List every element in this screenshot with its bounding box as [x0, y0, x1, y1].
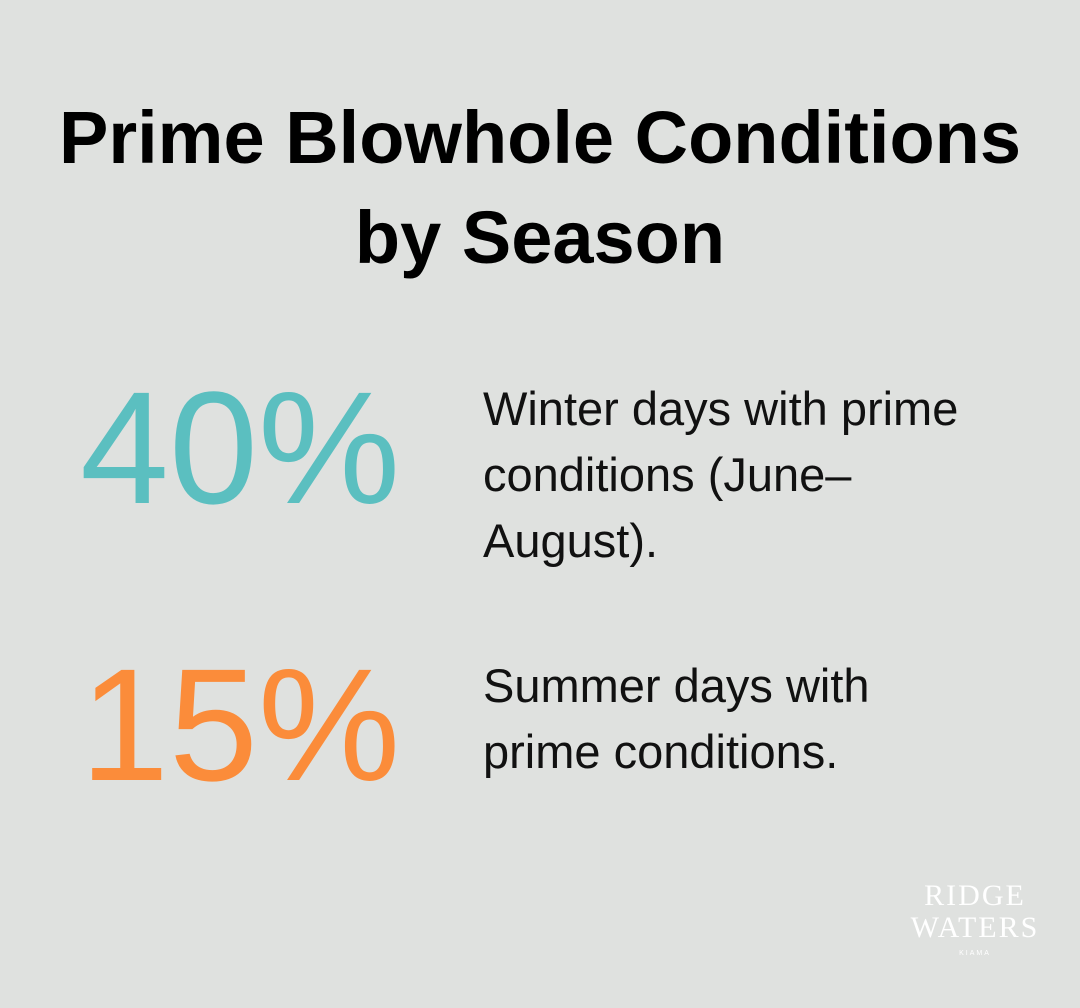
title: Prime Blowhole Conditions [59, 96, 1021, 179]
stat: 40%: 40% [80, 358, 400, 537]
logo [910, 879, 1039, 957]
title [59, 96, 1021, 279]
stat: 15%: 15% [80, 635, 400, 814]
text: summer: prime conditions. [483, 725, 838, 778]
logo: WATERS [911, 911, 1039, 944]
text: winter: August). [483, 514, 658, 567]
text: winter [483, 382, 958, 567]
text: summer: Summer days with [483, 659, 870, 712]
text: winter: conditions (June– [483, 448, 851, 501]
text: summer [483, 659, 870, 778]
logo: KIAMA [959, 950, 991, 957]
title: by Season [355, 196, 725, 279]
text: winter: Winter days with prime [483, 382, 958, 435]
logo: RIDGE [924, 879, 1026, 912]
